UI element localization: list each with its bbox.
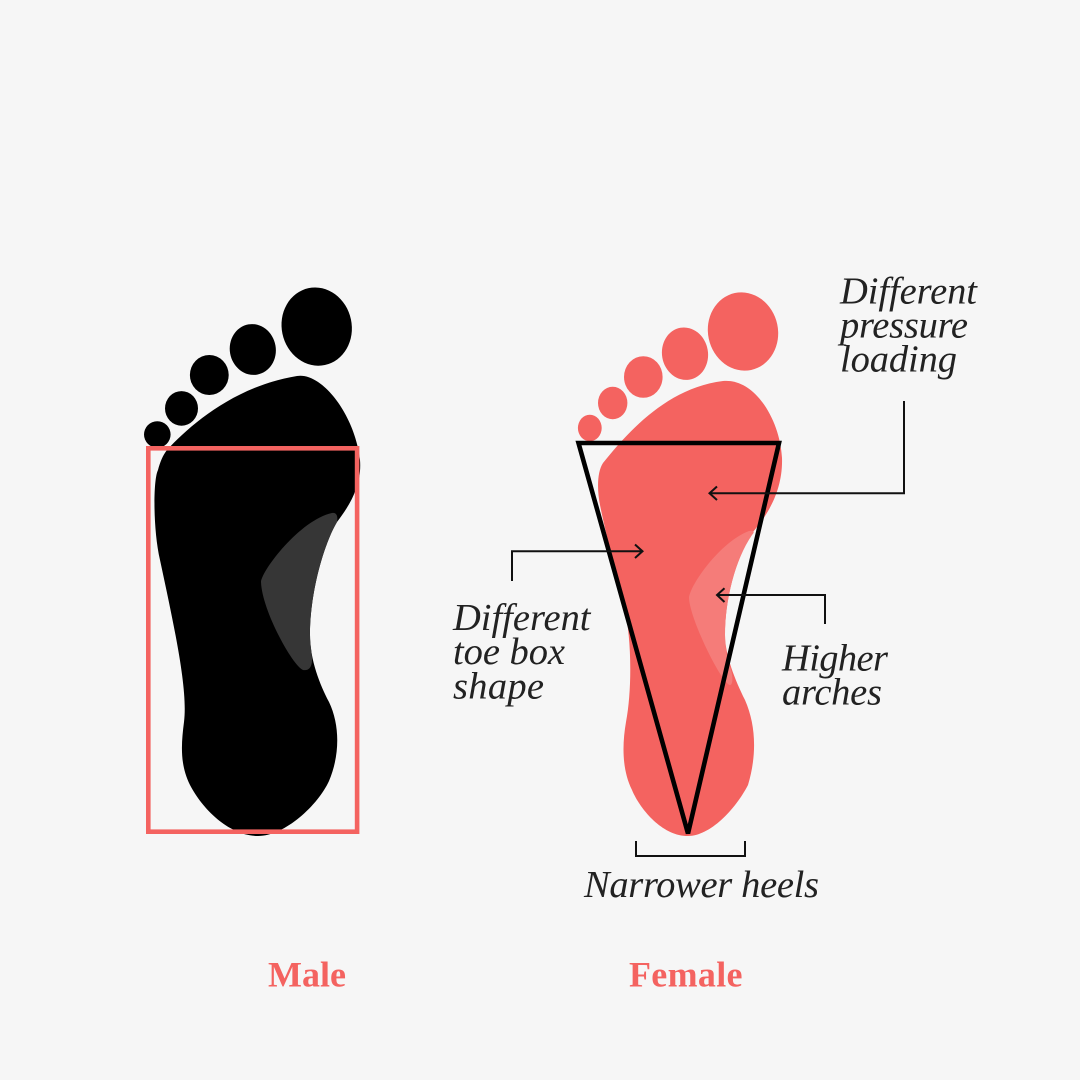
- callout text: [837, 270, 978, 380]
- label: male: Male: [268, 954, 346, 994]
- callout text: shape: [453, 666, 544, 708]
- female foot arch highlight: [689, 531, 754, 685]
- callout: different toe box shape: [452, 544, 642, 708]
- male foot illustration: [144, 281, 360, 836]
- callout: narrower heels: [583, 841, 819, 906]
- male foot arch highlight: [261, 513, 337, 670]
- callout text: pressure: [837, 305, 968, 347]
- label: female: Female: [629, 954, 743, 994]
- female comparison triangle: [578, 443, 779, 834]
- female foot toes: [578, 286, 785, 441]
- bracket: [636, 841, 745, 856]
- callout text: Narrower heels: [583, 864, 819, 906]
- callout text: loading: [840, 338, 957, 380]
- female foot illustration: [578, 286, 785, 836]
- callout text: [781, 638, 889, 714]
- callout: higher arches: [717, 588, 889, 714]
- callout arrow: [710, 401, 904, 500]
- callout text: toe box: [453, 631, 565, 673]
- male foot toes: [144, 281, 359, 448]
- callout text: Different: [452, 597, 592, 639]
- callout arrow: [512, 544, 642, 581]
- callout text: Different: [839, 270, 978, 312]
- callout text: [452, 597, 592, 708]
- male comparison rectangle: [148, 448, 357, 832]
- callout text: arches: [782, 672, 882, 714]
- male foot sole: [154, 376, 360, 836]
- callout: different pressure loading: [710, 270, 978, 500]
- callout arrow: [717, 588, 825, 624]
- callout text: Higher: [781, 638, 889, 680]
- female foot sole: [598, 381, 782, 836]
